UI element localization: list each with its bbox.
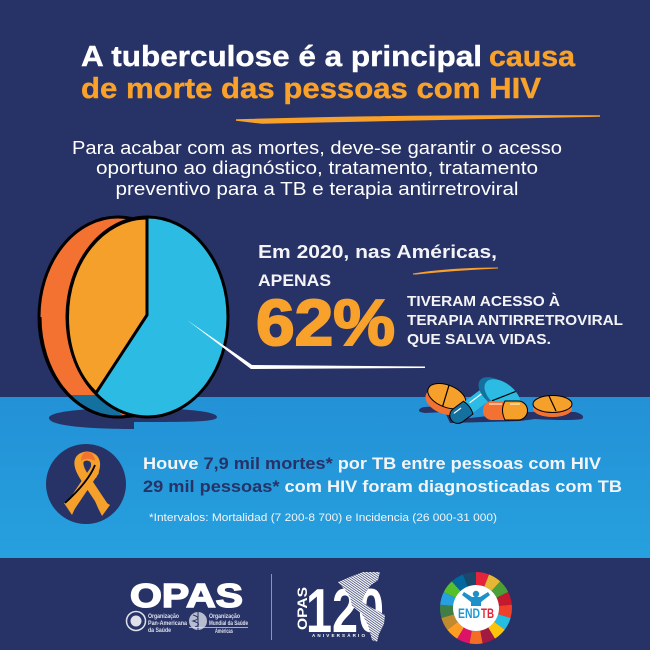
pie chart — [39, 217, 228, 429]
WHO name: Mundial da Saúde — [209, 620, 248, 627]
icon: pills — [419, 369, 583, 427]
title: de morte das pessoas com HIV — [81, 73, 542, 105]
logo: OPAS 120 anniversary — [294, 572, 385, 646]
END TB wordmark: END — [458, 605, 480, 621]
intro text — [72, 137, 562, 199]
figure icon — [462, 592, 490, 606]
callout line — [187, 320, 425, 369]
stat description: QUE SALVA VIDAS. — [407, 331, 551, 348]
ribbon tail notch — [92, 494, 110, 516]
ribbon left tail — [70, 470, 95, 507]
logo: OPAS 120 anniversary: ANIVERSÁRIO — [312, 632, 365, 638]
stat value: 62% — [256, 286, 395, 359]
logo: OPAS: OPAS — [130, 577, 243, 614]
title: causa — [489, 41, 576, 73]
logo: OPAS 120 anniversary: OPAS — [294, 587, 310, 630]
stat description: TERAPIA ANTIRRETROVIRAL — [407, 312, 623, 329]
tablet orange — [421, 378, 469, 420]
mortality and incidence text — [143, 454, 622, 496]
emblem: WHO — [189, 612, 207, 630]
PAHO name: da Saúde — [148, 627, 171, 634]
intro text: oportuno ao diagnóstico, tratamento, tratamento — [96, 157, 538, 178]
stat description — [407, 293, 623, 348]
pie front — [67, 217, 228, 417]
ribbon left tail end — [64, 498, 76, 515]
emblem: PAHO — [126, 612, 146, 630]
capsule orange — [483, 401, 527, 420]
stat heading: Em 2020, nas Américas, — [258, 242, 497, 262]
mortality and incidence text: 29 mil pessoas* com HIV foram diagnosticadas com TB — [143, 477, 622, 496]
mortality and incidence text: Houve 7,9 mil mortes* por TB entre pessoas com HIV — [143, 454, 602, 473]
tablet right — [533, 401, 572, 417]
pie orange slice 38% — [68, 218, 147, 393]
pie side — [39, 217, 197, 417]
title: A tuberculose é a principal — [81, 41, 482, 73]
WHO name: Organização — [209, 613, 240, 620]
ribbon shadow — [65, 465, 95, 503]
intro text: preventivo para a TB e terapia antirretroviral — [116, 178, 518, 199]
divider — [271, 574, 272, 640]
SDG colour wheel — [446, 578, 506, 638]
title underline — [236, 116, 600, 123]
tablet blue — [473, 369, 527, 419]
ribbon top highlight — [81, 452, 95, 461]
PAHO name: Pan-Americana — [148, 620, 187, 627]
stat underline — [413, 268, 498, 274]
stat label: APENAS — [258, 272, 331, 290]
pie shadow — [49, 408, 217, 429]
capsule blue — [447, 383, 497, 427]
pill shadows — [419, 407, 583, 423]
PAHO name — [148, 613, 187, 634]
footnote: *Intervalos: Mortalidad (7 200-8 700) e Incidencia (26 000-31 000) — [149, 512, 497, 524]
americas map — [338, 572, 385, 642]
ribbon right tail and loop — [79, 456, 105, 508]
title — [81, 41, 576, 105]
logo: OPAS — [126, 577, 248, 635]
WHO name — [209, 613, 248, 635]
PAHO name: Organização — [148, 613, 179, 620]
WHO name: Américas — [215, 628, 233, 635]
logo: OPAS 120 anniversary: 120 — [306, 577, 384, 646]
logo: END TB — [446, 578, 506, 638]
panel: blue floor — [0, 397, 650, 558]
intro text: Para acabar com as mortes, deve-se garantir o acesso — [72, 137, 562, 158]
stat description: TIVERAM ACESSO À — [407, 293, 560, 310]
icon: awareness ribbon badge — [46, 444, 126, 524]
logo: END TB: TB — [481, 605, 494, 621]
